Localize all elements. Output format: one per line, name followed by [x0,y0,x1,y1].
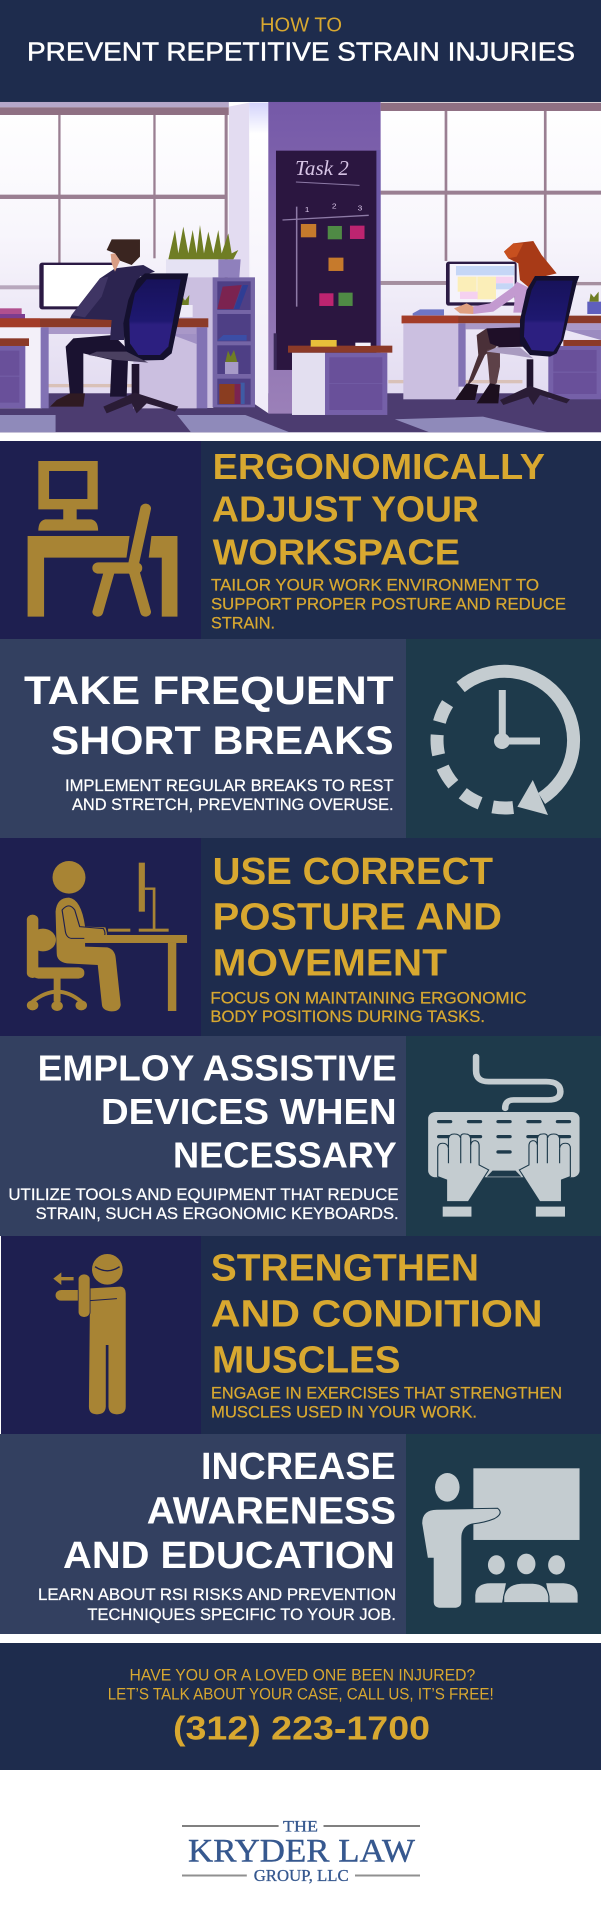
floor patches [0,415,56,432]
heading: AND CONDITION [211,1294,543,1336]
panel: increase awareness and education [0,1434,601,1634]
chalkboard with task notes: 3 [358,204,363,213]
logo: the kryder law group: KRYDER LAW [188,1834,416,1870]
chalkboard with task notes: Task 2 [295,156,349,180]
center filing cabinet [288,340,392,415]
heading: SHORT BREAKS [51,719,394,763]
heading: AWARENESS [147,1491,396,1533]
panel: employ assistive devices when necessary [0,1036,601,1236]
heading [212,446,545,573]
header banner [0,0,601,102]
icon: hands on ergonomic keyboard [428,1057,580,1217]
description: ENGAGE IN EXERCISES THAT STRENGTHEN [211,1383,562,1402]
heading: POSTURE AND [213,896,502,938]
description: SUPPORT PROPER POSTURE AND REDUCE [211,595,566,614]
description: BODY POSITIONS DURING TASKS. [210,1007,485,1026]
description [211,1383,562,1421]
heading: MOVEMENT [213,943,447,985]
panel: use correct posture and movement [0,838,601,1036]
description: STRAIN. [211,614,275,633]
pillar [229,103,249,407]
heading: ADJUST YOUR [212,489,479,530]
right desk and female worker [402,241,601,405]
icon: person stretching arm [53,1254,126,1414]
phone number: (312) 223-1700 [173,1709,430,1746]
description: STRAIN, SUCH AS ERGONOMIC KEYBOARDS. [36,1204,399,1223]
description [210,988,527,1026]
chalkboard with task notes: 2 [332,202,337,211]
illustration: office scene with two workers [0,102,601,432]
left desk, plant, shelf and male worker [0,225,255,413]
heading: EMPLOY ASSISTIVE [38,1048,397,1089]
heading [213,851,502,985]
logo: the kryder law group: THE [283,1819,318,1836]
panel: strengthen and condition muscles [1,1236,601,1434]
heading: WORKSPACE [213,532,460,573]
description: TECHNIQUES SPECIFIC TO YOUR JOB. [87,1605,396,1624]
panel: take frequent short breaks [0,639,601,838]
heading: TAKE FREQUENT [24,669,394,713]
icon: seated person at desk [27,861,187,1011]
description: FOCUS ON MAINTAINING ERGONOMIC [210,988,527,1007]
main title: PREVENT REPETITIVE STRAIN INJURIES [27,39,575,67]
heading: INCREASE [201,1446,396,1488]
icon: teacher at board with audience [422,1468,580,1608]
heading: STRENGTHEN [211,1248,479,1290]
logo: the kryder law group [182,1819,420,1885]
heading: MUSCLES [212,1340,400,1382]
description [211,576,566,633]
heading: NECESSARY [173,1134,397,1175]
call to action text: HAVE YOU OR A LOVED ONE BEEN INJURED? [130,1666,475,1684]
description: AND STRETCH, PREVENTING OVERUSE. [72,795,394,814]
window frames [0,102,601,387]
heading: USE CORRECT [213,851,493,893]
description: TAILOR YOUR WORK ENVIRONMENT TO [211,576,539,595]
call to action banner [0,1643,601,1770]
heading [63,1446,396,1577]
heading [24,669,394,763]
chalkboard with task notes: 1 [305,205,309,214]
description: MUSCLES USED IN YOUR WORK. [211,1402,477,1421]
description: LEARN ABOUT RSI RISKS AND PREVENTION [38,1585,396,1604]
description [65,776,394,814]
heading [211,1248,543,1382]
description [38,1585,396,1624]
chalkboard with task notes [274,151,376,370]
heading: AND EDUCATION [63,1535,395,1577]
call to action text [108,1666,494,1703]
description [8,1185,399,1223]
icon: clock with circular arrow [430,665,580,815]
call to action text: LET’S TALK ABOUT YOUR CASE, CALL US, IT’S FREE! [108,1685,494,1703]
heading: DEVICES WHEN [101,1091,397,1132]
heading [38,1048,397,1175]
description: UTILIZE TOOLS AND EQUIPMENT THAT REDUCE [8,1185,399,1204]
logo: the kryder law group: GROUP, LLC [254,1866,349,1885]
panel: ergonomically adjust your workspace [0,441,601,639]
description: IMPLEMENT REGULAR BREAKS TO REST [65,776,394,795]
title eyebrow: how to: HOW TO [260,15,342,37]
icon: desk with computer and chair [28,461,177,617]
heading: ERGONOMICALLY [213,446,545,487]
